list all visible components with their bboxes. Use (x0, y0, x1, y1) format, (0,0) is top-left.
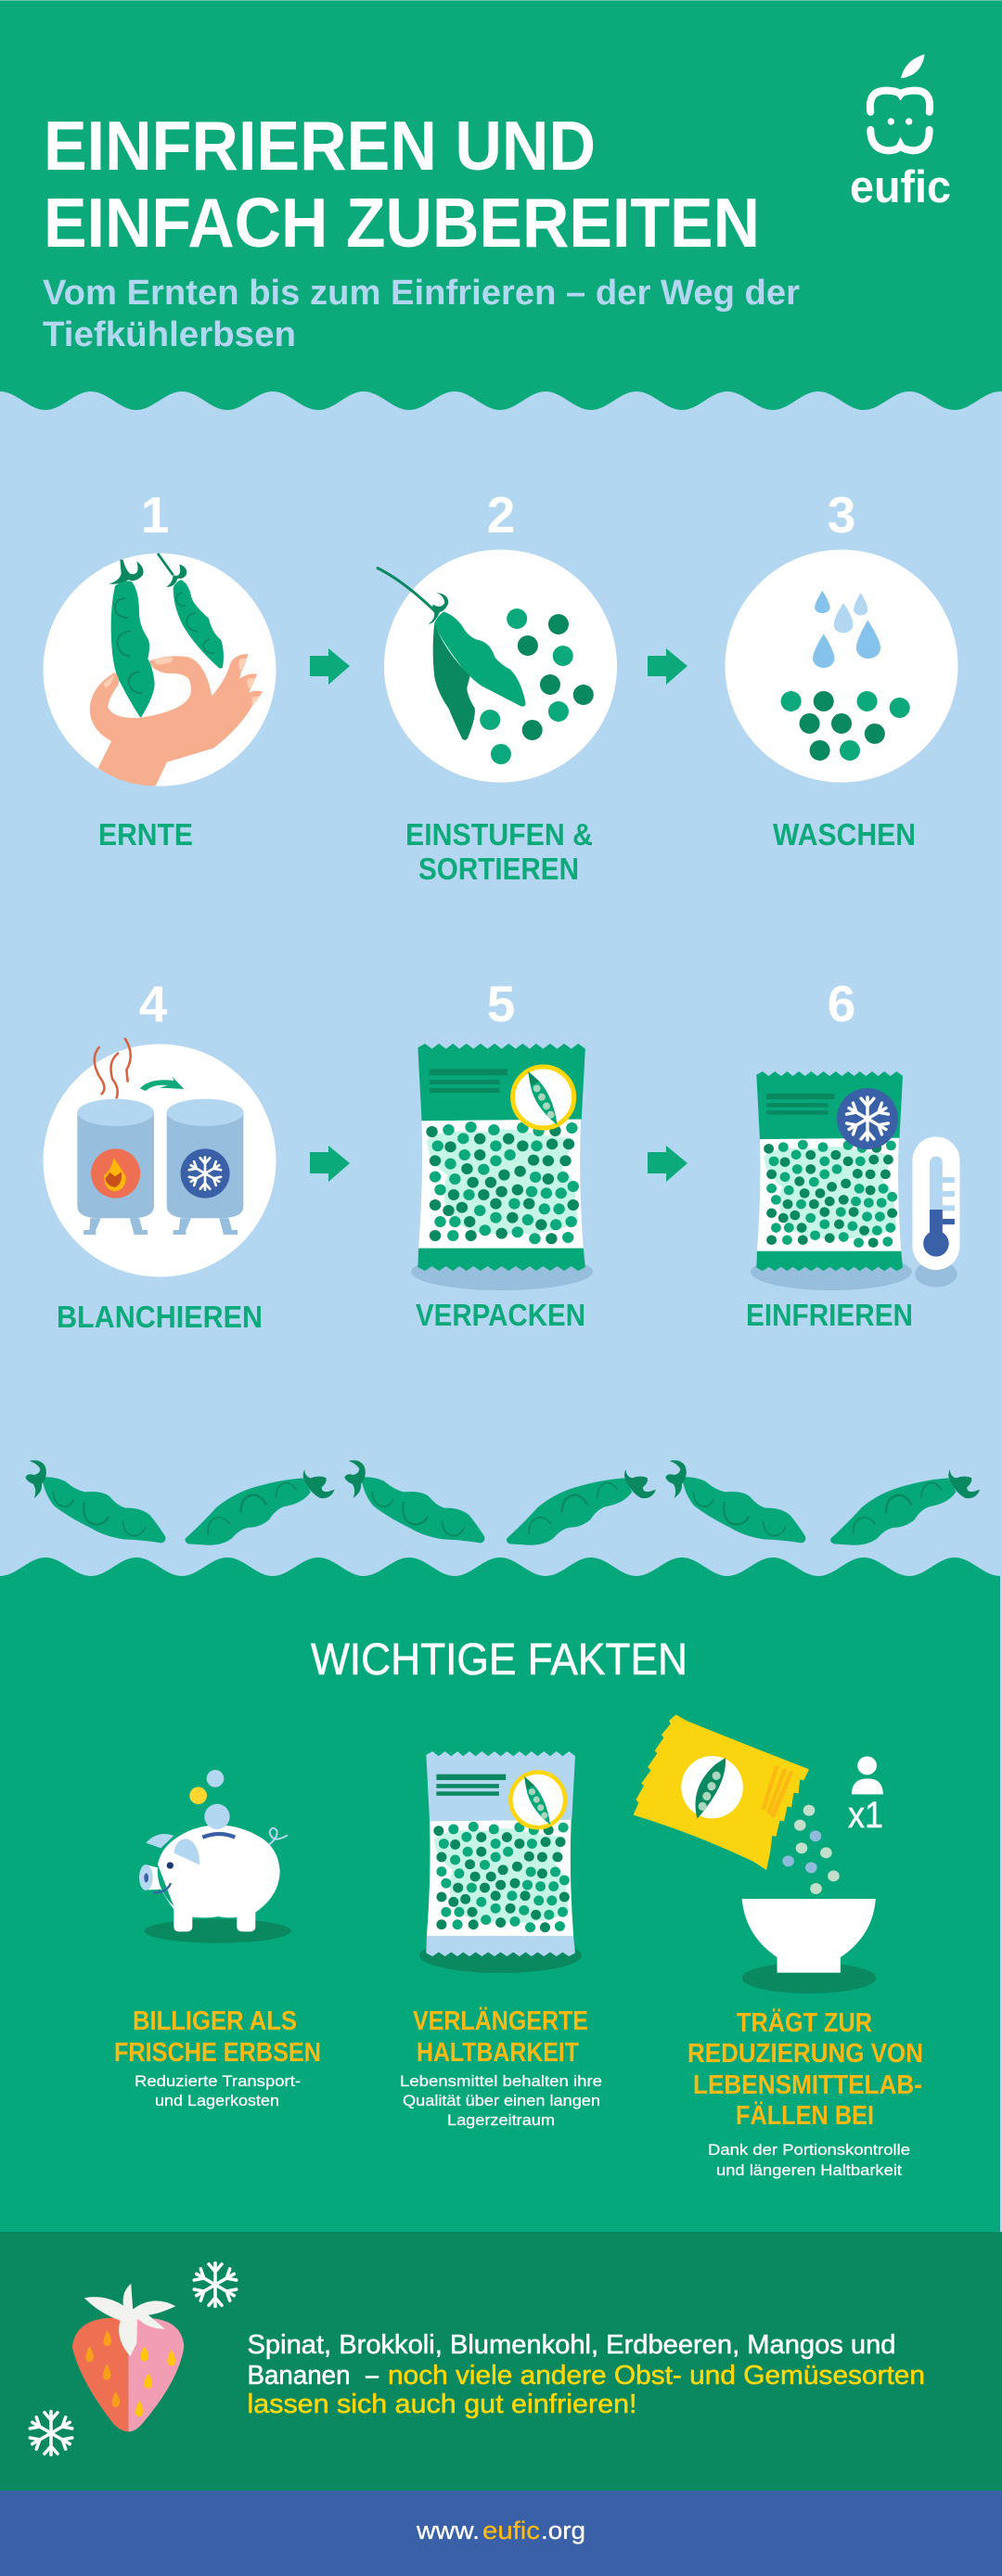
body: Lagerzeitraum (447, 2111, 555, 2129)
body (135, 2072, 301, 2109)
icon: two tanks with steam (77, 1038, 243, 1235)
body (400, 2072, 602, 2129)
label: pea badge (510, 1773, 565, 1827)
icon: package on green (419, 1751, 582, 1973)
shadow (751, 1253, 912, 1290)
callout text: Spinat, Brokkoli, Blumenkohl, Erdbeeren, Mangos und (247, 2330, 896, 2360)
header wave edge (0, 391, 1002, 410)
circle (384, 549, 617, 783)
icon: snowflake top (193, 2263, 238, 2306)
panel: step 5 package (411, 1044, 593, 1290)
step labels row 2: BLANCHIEREN (57, 1300, 263, 1334)
panel: step 2 grading (377, 549, 617, 783)
snowflake badge (837, 1088, 898, 1149)
arrow 2 to 3 (648, 648, 687, 685)
step labels row 2: EINFRIEREN (746, 1298, 913, 1332)
text block: cheaper (114, 2006, 321, 2109)
website url: www. (416, 2517, 480, 2544)
circle (43, 1044, 276, 1276)
icon: apple face (870, 54, 930, 150)
subtitle: Tiefkühlerbsen (43, 315, 296, 354)
text block: shelf life (400, 2006, 602, 2129)
header background (0, 0, 1002, 399)
subtitle (43, 274, 800, 354)
heading: VERLÄNGERTE (413, 2006, 588, 2036)
body: und Lagerkosten (155, 2092, 279, 2109)
step labels row 1 (98, 817, 916, 886)
arrow 1 to 2 (310, 648, 350, 685)
heading: HALTBARKEIT (417, 2038, 579, 2068)
circle (43, 553, 276, 787)
package with peas (756, 1071, 903, 1271)
person icon (852, 1756, 883, 1794)
falling peas (782, 1805, 840, 1894)
heading (114, 2006, 321, 2068)
step numbers row 1 (141, 486, 855, 544)
facts section background (0, 1557, 1000, 2232)
heading: FÄLLEN BEI (736, 2100, 874, 2131)
title: EINFACH ZUBEREITEN (44, 184, 760, 262)
heading: key facts: WICHTIGE FAKTEN (311, 1635, 687, 1685)
portion label: x1 (848, 1795, 883, 1836)
step labels row 2: VERPACKEN (416, 1298, 585, 1332)
circle (726, 549, 957, 783)
heading: FRISCHE ERBSEN (114, 2038, 321, 2068)
step numbers row 1: 3 (828, 486, 855, 544)
bowl (742, 1899, 876, 1973)
step numbers row 2 (139, 975, 855, 1032)
heading: REDUZIERUNG VON (687, 2039, 923, 2069)
icon: snowflake on tank (188, 1157, 222, 1190)
icon: hand holding pods (90, 554, 263, 786)
step numbers row 2: 6 (828, 975, 855, 1032)
heading: LEBENSMITTELAB- (693, 2070, 922, 2100)
icon: thermometer (912, 1136, 959, 1288)
icon: open pod (377, 568, 526, 740)
body: und längeren Haltbarkeit (716, 2161, 902, 2179)
subtitle: Vom Ernten bis zum Einfrieren – der Weg der (43, 274, 800, 313)
heading (687, 2007, 923, 2131)
step labels row 1: SORTIEREN (418, 852, 579, 886)
text block: food waste (687, 2007, 923, 2179)
shadow (419, 1938, 582, 1973)
panel: step 1 harvest (43, 553, 276, 787)
website url (416, 2517, 585, 2544)
panel: step 4 blanching (43, 1038, 276, 1276)
step numbers row 2: 5 (487, 975, 515, 1032)
body: Dank der Portionskontrolle (708, 2141, 910, 2159)
logo wordmark: eufic (850, 162, 951, 212)
body (708, 2141, 910, 2179)
step labels row 1: ERNTE (98, 817, 193, 852)
panel: step 6 freezing (751, 1071, 959, 1290)
body: Qualität über einen langen (403, 2092, 600, 2109)
step numbers row 1: 1 (141, 486, 169, 544)
heading (413, 2006, 588, 2068)
callout text: – (366, 2361, 379, 2390)
shadow (411, 1253, 593, 1290)
package with peas (418, 1044, 585, 1271)
body: Reduzierte Transport- (135, 2072, 301, 2090)
callout text: lassen sich auch gut einfrieren! (247, 2390, 636, 2419)
icon: water drops and peas (781, 591, 910, 761)
step labels row 1: WASCHEN (773, 817, 916, 852)
icon: piggy bank (139, 1770, 291, 1943)
eufic logo (850, 54, 951, 212)
icon: packet pouring into bowl (634, 1714, 883, 1993)
heading: BILLIGER ALS (133, 2006, 297, 2036)
icon: sorted peas (480, 609, 594, 764)
light blue steps background (0, 391, 1002, 1579)
title: EINFRIEREN UND (44, 107, 596, 185)
decorative pod row (25, 1460, 980, 1545)
panel: step 3 washing (726, 549, 957, 783)
heading: TRÄGT ZUR (737, 2007, 872, 2038)
callout text: Bananen (247, 2361, 351, 2390)
callout text (247, 2330, 925, 2419)
callout text: noch viele andere Obst- und Gemüsesorten (388, 2361, 925, 2390)
arrow 5 to 6 (648, 1146, 687, 1182)
icon: snowflake bottom (29, 2412, 73, 2454)
package with peas (426, 1751, 575, 1956)
panel: other foods (0, 2232, 1002, 2491)
shadow under bowl (742, 1963, 876, 1993)
step numbers row 1: 2 (487, 486, 515, 544)
website url: .org (541, 2517, 585, 2544)
yellow packet (634, 1714, 809, 1870)
step numbers row 2: 4 (139, 975, 168, 1032)
title (44, 107, 760, 262)
step labels row 1: EINSTUFEN & (405, 817, 593, 852)
step labels row 2 (57, 1298, 913, 1334)
footer (0, 2491, 1002, 2576)
icon: strawberry (72, 2284, 184, 2431)
website url: eufic (482, 2517, 540, 2544)
label: pea badge (513, 1067, 574, 1128)
arrow 4 to 5 (310, 1146, 350, 1182)
body: Lebensmittel behalten ihre (400, 2072, 602, 2090)
